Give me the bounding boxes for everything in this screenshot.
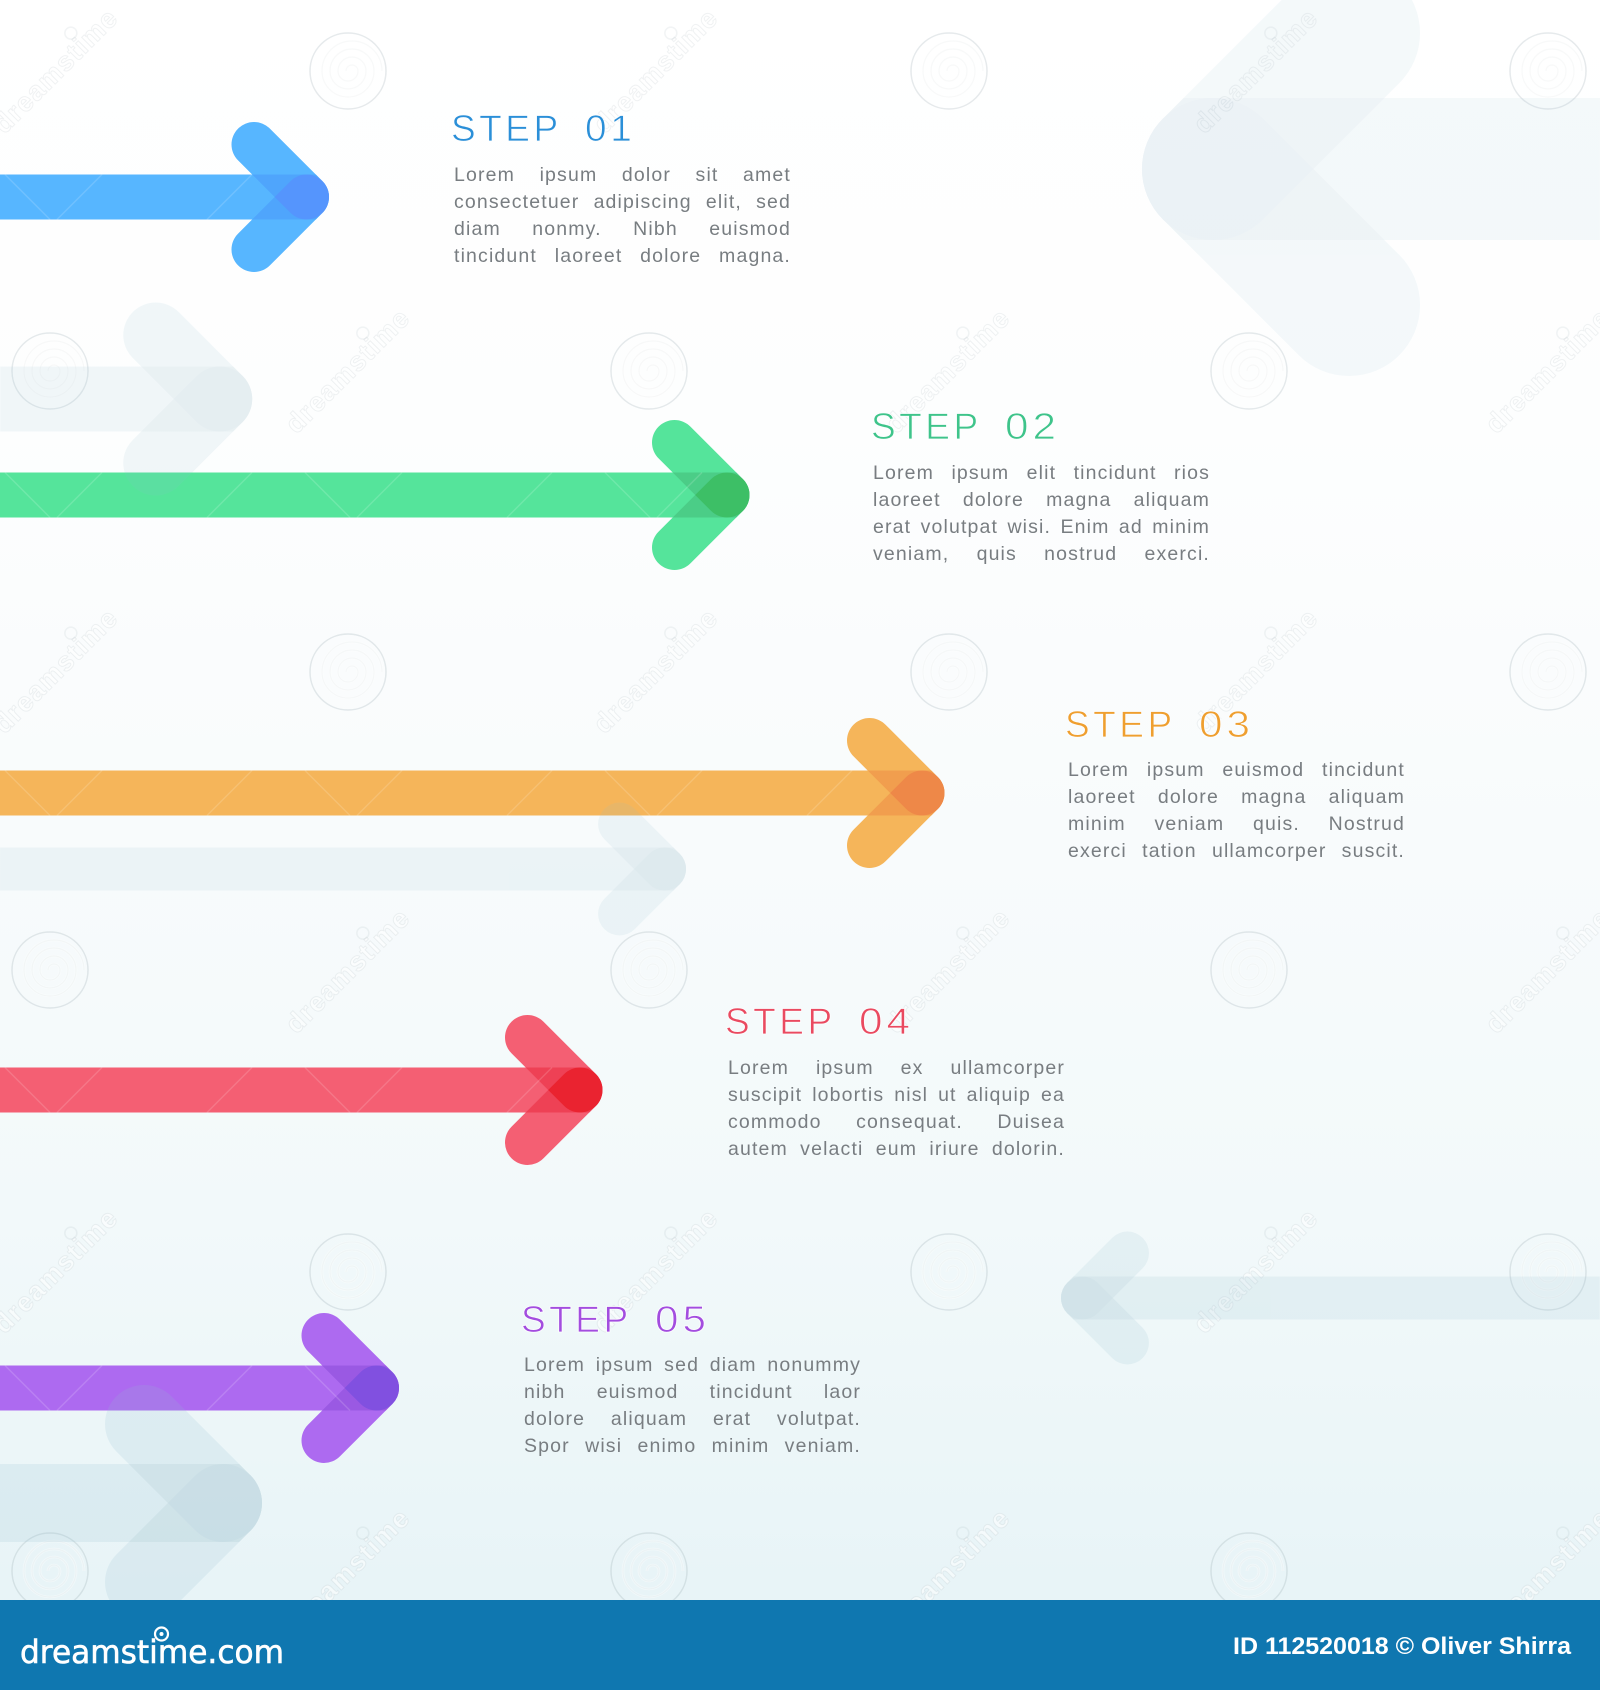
watermark pattern: dreamstime	[1187, 3, 1323, 139]
watermark pattern: dreamstime	[879, 903, 1015, 1039]
logo: dreamstime.com: dreamstime.com	[20, 1633, 284, 1671]
arrow: step 05 purple	[0, 1313, 399, 1463]
footer banner	[0, 1600, 1600, 1690]
text: step 04 description: commodo consequat. Duisea	[728, 1110, 1065, 1132]
arrow: step 03 orange	[0, 718, 944, 868]
arrow: step 01 blue	[0, 122, 329, 272]
ghost arrow: lower right	[1061, 1253, 1600, 1343]
text: step 02 description	[873, 462, 1210, 564]
text: step 02 description: veniam, quis nostrud exerci.	[873, 542, 1210, 564]
heading: step 01: 01	[585, 108, 635, 149]
heading: step 01	[451, 108, 635, 149]
ghost arrow: large top right	[1142, 33, 1600, 305]
heading: step 03: STEP	[1065, 704, 1175, 744]
text: step 01 description: consectetuer adipiscing elit, sed	[454, 191, 791, 213]
panel: step 04	[0, 1001, 1065, 1165]
panel: step 01	[0, 108, 791, 272]
watermark pattern: dreamstime	[587, 603, 723, 739]
heading: step 02	[871, 406, 1060, 447]
heading: step 04: 04	[859, 1001, 914, 1042]
ghost arrow: upper left	[0, 335, 252, 463]
heading: step 03	[1065, 704, 1254, 744]
text: step 01 description	[454, 164, 791, 267]
heading: step 03: 03	[1199, 704, 1254, 744]
heading: step 01: STEP	[451, 108, 561, 149]
watermark pattern: dreamstime	[587, 1203, 723, 1339]
text: step 02 description: erat volutpat wisi. Enim ad minim	[873, 516, 1210, 538]
heading: step 04	[725, 1001, 914, 1042]
panel: step 05	[0, 1299, 861, 1463]
panel: step 03	[0, 704, 1405, 868]
watermark pattern: dreamstime	[1187, 603, 1323, 739]
credit text: ID 112520018 © Oliver Shirra	[1233, 1633, 1572, 1660]
heading: step 05	[521, 1299, 710, 1340]
arrow: step 04 red	[0, 1015, 602, 1165]
text: step 03 description: Lorem ipsum euismod tincidunt	[1068, 759, 1405, 781]
heading: step 02: STEP	[871, 406, 981, 447]
text: step 05 description: nibh euismod tincidunt laor	[524, 1381, 861, 1403]
watermark pattern: dreamstime	[587, 3, 723, 139]
text: step 03 description	[1068, 759, 1405, 862]
heading: step 04: STEP	[725, 1001, 835, 1042]
watermark pattern: dreamstime	[879, 1503, 1015, 1639]
text: step 04 description: autem velacti eum iriure dolorin.	[728, 1138, 1065, 1160]
arrow: step 02 green	[0, 420, 750, 570]
text: step 05 description: Lorem ipsum sed diam nonummy	[524, 1354, 861, 1376]
ghost arrow: bottom left	[0, 1424, 262, 1582]
text: step 02 description: Lorem ipsum elit tincidunt rios	[873, 462, 1210, 484]
watermark pattern: dreamstime	[1187, 1203, 1323, 1339]
text: step 04 description: Lorem ipsum ex ullamcorper	[728, 1056, 1065, 1078]
heading: step 02: 02	[1005, 406, 1060, 447]
text: step 04 description	[728, 1056, 1065, 1160]
watermark pattern: dreamstime	[279, 1503, 415, 1639]
watermark pattern: dreamstime	[279, 303, 415, 439]
text: step 05 description: dolore aliquam erat volutpat.	[524, 1408, 861, 1430]
heading: step 05: 05	[655, 1299, 710, 1340]
text: step 01 description: Lorem ipsum dolor sit amet	[454, 164, 791, 186]
watermark pattern: dreamstime	[879, 303, 1015, 439]
text: step 05 description	[524, 1354, 861, 1457]
text: step 03 description: exerci tation ullamcorper suscit.	[1068, 840, 1405, 862]
ghost arrow: middle	[0, 824, 686, 914]
heading: step 05: STEP	[521, 1299, 631, 1340]
text: step 03 description: laoreet dolore magna aliquam	[1068, 786, 1405, 808]
panel: step 02	[0, 406, 1210, 570]
text: step 02 description: laoreet dolore magna aliquam	[873, 488, 1210, 510]
text: step 04 description: suscipit lobortis nisl ut aliquip ea	[728, 1084, 1065, 1106]
text: step 01 description: tincidunt laoreet dolore magna.	[454, 245, 791, 267]
text: step 05 description: Spor wisi enimo minim veniam.	[524, 1435, 861, 1457]
text: step 01 description: diam nonmy. Nibh euismod	[454, 218, 791, 240]
watermark pattern: dreamstime	[279, 903, 415, 1039]
text: step 03 description: minim veniam quis. Nostrud	[1068, 813, 1405, 835]
